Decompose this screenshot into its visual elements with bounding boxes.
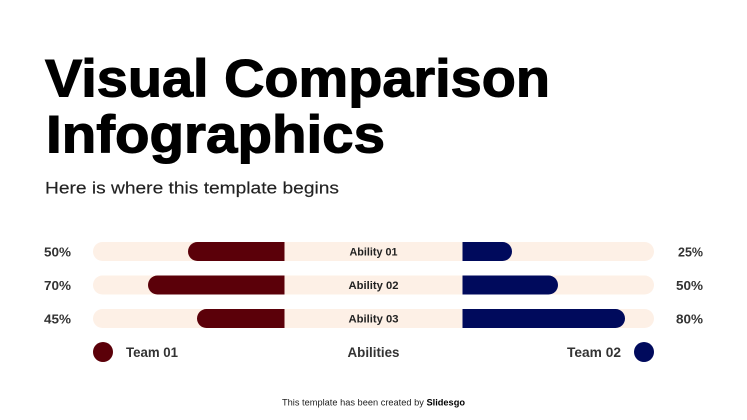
legend: team 01 — [93, 342, 178, 362]
value: right 80%: 80% — [676, 312, 703, 326]
track: ability 01 — [93, 242, 654, 261]
label: ability 02: Ability 02 — [348, 280, 398, 292]
right bar: team 02 80% — [462, 309, 625, 328]
footer credit: This template has been created by Slidesgo — [282, 398, 466, 408]
label: team 02: Team 02 — [567, 345, 621, 360]
subtitle: Here is where this template begins — [45, 179, 339, 198]
track: ability 02 — [93, 276, 654, 294]
track: ability 03 — [93, 309, 654, 328]
label: ability 01: Ability 01 — [350, 246, 398, 258]
row: ability 02 — [44, 276, 703, 294]
icon: team 01 dot — [93, 342, 113, 362]
row: ability 03 — [44, 309, 703, 328]
legend: abilities: Abilities — [348, 345, 400, 360]
row: ability 01 — [44, 242, 703, 261]
right bar: team 02 25% — [462, 242, 512, 261]
label: ability 03: Ability 03 — [348, 314, 398, 326]
value: right 25%: 25% — [678, 244, 703, 260]
title — [45, 49, 550, 164]
left bar: team 01 50% — [188, 242, 284, 261]
icon: team 02 dot — [634, 342, 654, 362]
value: left 50%: 50% — [44, 244, 71, 260]
legend: team 02 — [567, 342, 654, 362]
left bar: team 01 45% — [197, 309, 284, 328]
label: team 01: Team 01 — [126, 345, 178, 360]
value: left 70%: 70% — [44, 278, 71, 293]
left bar: team 01 70% — [148, 276, 284, 294]
value: left 45%: 45% — [44, 312, 71, 326]
value: right 50%: 50% — [676, 278, 703, 293]
right bar: team 02 50% — [462, 276, 558, 294]
title: Visual Comparison — [45, 49, 550, 108]
title: Infographics — [46, 105, 385, 164]
